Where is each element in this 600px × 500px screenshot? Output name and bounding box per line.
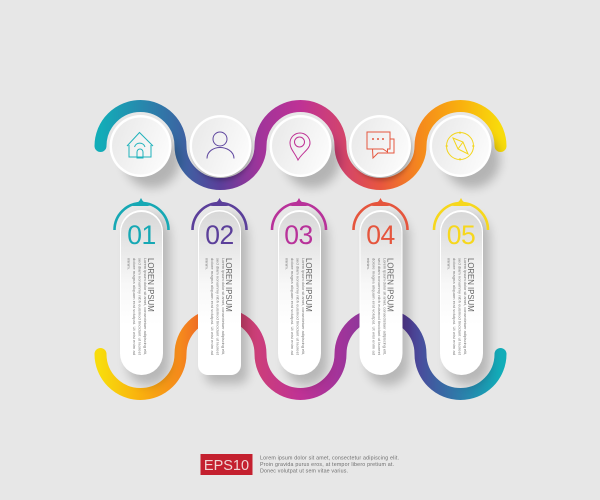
body text bbox=[284, 258, 306, 356]
card 5 bbox=[434, 198, 490, 386]
body text: dolore magna aliquam erat volutpat. Ut wisi enim ad bbox=[210, 258, 215, 355]
body text bbox=[366, 258, 388, 356]
card 4 bbox=[354, 198, 410, 386]
body text: minim. bbox=[446, 258, 452, 270]
heading: LOREN IPSUM bbox=[304, 258, 313, 312]
circle 1 with house icon bbox=[110, 115, 180, 188]
body text: dolore magna aliquam erat volutpat. Ut wisi enim ad bbox=[372, 258, 376, 355]
body text: minim. bbox=[284, 258, 290, 270]
body text bbox=[126, 258, 148, 356]
body text: sed diam nonummy nibh euismod tincidunt ut laoreet bbox=[458, 258, 462, 356]
heading: LOREN IPSUM bbox=[224, 258, 233, 312]
card 3 bbox=[272, 198, 328, 386]
number: 03 bbox=[284, 220, 313, 250]
heading: LOREN IPSUM bbox=[466, 258, 475, 312]
body text: Lorem ipsum dolor sit amet, consectetuer adipiscing elit, bbox=[301, 258, 306, 355]
footer text: Proin gravida purus eros, at tempor libero pretium at. bbox=[260, 462, 394, 468]
body text: dolore magna aliquam erat volutpat. Ut wisi enim ad bbox=[452, 258, 457, 355]
body text bbox=[204, 258, 226, 356]
number: 02 bbox=[205, 220, 234, 250]
body text: minim. bbox=[366, 258, 371, 270]
body text: sed diam nonummy nibh euismod tincidunt ut laoreet bbox=[296, 258, 300, 356]
body text: sed diam nonummy nibh euismod tincidunt ut laoreet bbox=[216, 258, 220, 356]
circle 4 with chat icon bbox=[349, 115, 412, 180]
heading: LOREN IPSUM bbox=[386, 258, 394, 312]
circle 2 with person icon bbox=[190, 115, 252, 180]
body text: sed diam nonummy nibh euismod tincidunt ut laoreet bbox=[377, 258, 382, 356]
body text: Lorem ipsum dolor sit amet, consectetuer adipiscing elit, bbox=[463, 258, 468, 355]
body text: Lorem ipsum dolor sit amet, consectetuer adipiscing elit, bbox=[143, 258, 148, 355]
icon: location pin bbox=[290, 133, 310, 160]
circle 3 with location pin icon bbox=[270, 115, 340, 188]
number: 05 bbox=[447, 220, 475, 250]
body text: minim. bbox=[204, 258, 210, 270]
arch marker bbox=[354, 198, 408, 230]
arch marker bbox=[272, 198, 326, 230]
body text bbox=[446, 258, 468, 356]
number: 01 bbox=[127, 220, 156, 250]
icon: person bbox=[207, 132, 234, 158]
body text: Lorem ipsum dolor sit amet, consectetuer adipiscing elit, bbox=[382, 258, 388, 355]
number: 04 bbox=[366, 220, 395, 250]
arch marker bbox=[192, 198, 246, 230]
body text: dolore magna aliquam erat volutpat. Ut wisi enim ad bbox=[290, 258, 295, 355]
icon: house bbox=[127, 132, 153, 158]
heading: LOREN IPSUM bbox=[146, 258, 155, 312]
EPS10 badge: EPS10 bbox=[204, 458, 249, 474]
body text: Lorem ipsum dolor sit amet, consectetuer adipiscing elit, bbox=[221, 258, 226, 355]
icon: compass bbox=[446, 132, 474, 160]
arch marker bbox=[114, 198, 168, 230]
body text: minim. bbox=[126, 258, 132, 270]
body text: sed diam nonummy nibh euismod tincidunt ut laoreet bbox=[138, 258, 142, 356]
EPS10 badge bbox=[200, 454, 252, 475]
footer text: Donec volutpat ut sem vitae varius. bbox=[260, 468, 348, 474]
top ribbon wave bbox=[100, 106, 500, 184]
footer text bbox=[260, 456, 399, 474]
card 2 bbox=[192, 198, 248, 384]
body text: dolore magna aliquam erat volutpat. Ut wisi enim ad bbox=[132, 258, 137, 355]
arch marker bbox=[434, 198, 488, 230]
circle 5 with compass icon bbox=[430, 115, 500, 188]
icon: chat bubbles bbox=[367, 132, 394, 158]
footer text: Lorem ipsum dolor sit amet, consectetur adipiscing elit. bbox=[260, 456, 399, 462]
card 1 bbox=[114, 198, 170, 386]
bottom ribbon wave bbox=[100, 314, 500, 394]
